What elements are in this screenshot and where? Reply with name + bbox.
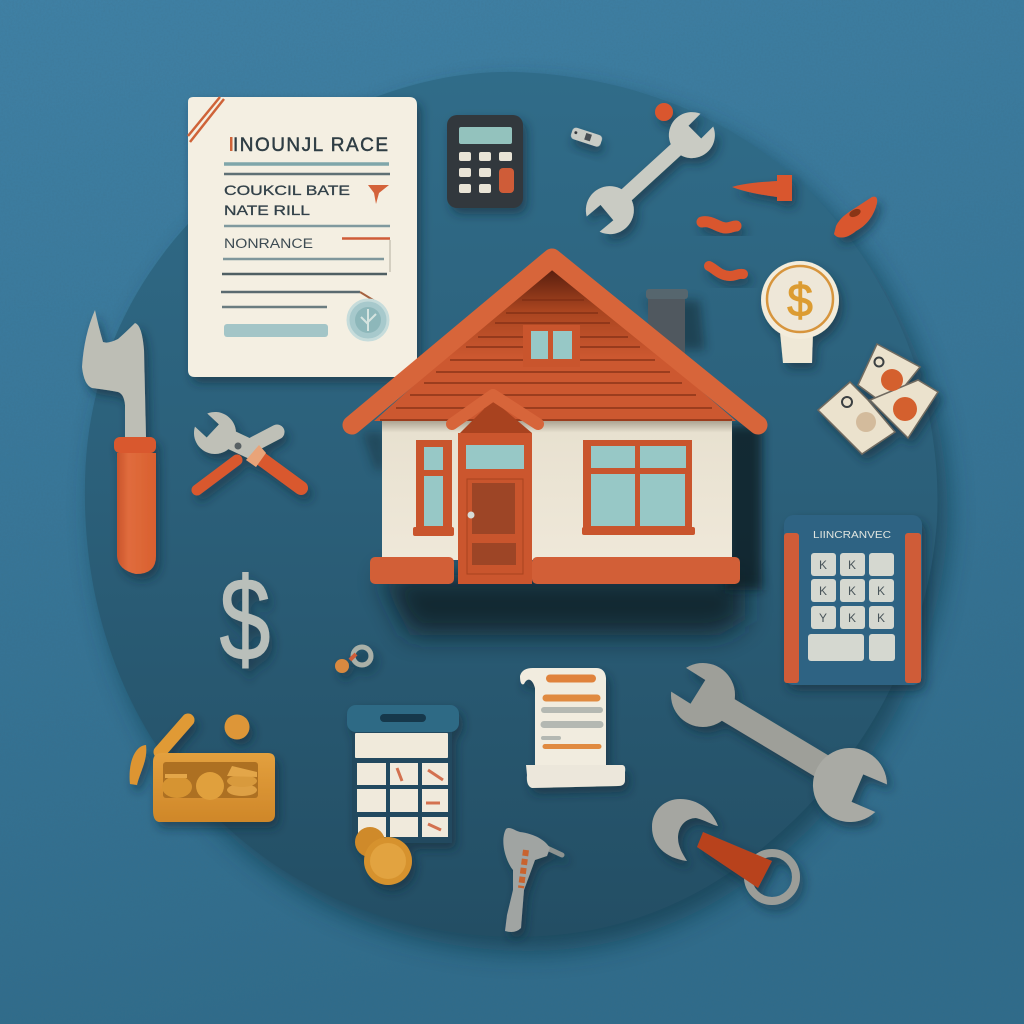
document title: INOUNJL RACE [233,135,388,156]
right window [582,440,695,535]
icon: small red funnel [368,185,389,204]
icon: grey wrench large [662,653,896,832]
keypad key letters: K [877,611,885,625]
keypad label: LIINCRANVEC [813,529,891,541]
keypad key letters: Y [819,611,827,625]
roof siding lines [380,300,732,420]
document text: insurance: NONRANCE [224,236,313,251]
icon: open wrench with red handle [652,799,796,901]
panel: insurance document [188,97,417,377]
icon: calculator top [447,115,523,208]
icon: gold coins [355,827,412,885]
keypad key letters: K [848,558,856,572]
icon: dollar sign: $ [219,554,271,686]
keypad key letters: K [848,611,856,625]
keypad key letters: K [819,558,827,572]
document teal bar [224,324,328,337]
document text: council rate: COUKCIL BATE [224,182,350,198]
icon: wrench top [578,104,723,243]
icon: crossed tools [187,405,301,490]
disc shadow [95,86,948,951]
illustration: house [352,258,758,584]
left window [413,440,454,536]
icon: calendar table [347,705,459,885]
keypad key letters: K [819,584,827,598]
icon: red clip one [702,222,736,228]
icon: banknotes [818,344,938,454]
attic window [523,325,580,367]
icon: keypad panel [784,515,922,685]
icon: small red ball [655,103,673,121]
door frame and door [458,433,532,584]
icon: hand tool [503,828,562,932]
foundation [370,557,740,584]
icon: red clip two [709,266,743,276]
icon: dollar bulb badge: $ [787,274,813,326]
house shadow [362,300,762,635]
icon: gold cash stack [130,714,275,822]
keypad key letters [819,558,885,625]
icon: receipt scroll [520,668,625,788]
document title accent [230,137,232,151]
roof eaves [352,258,758,425]
keypad key letters: K [848,584,856,598]
icon: small chain [335,647,371,673]
icon: axe hammer [82,310,156,574]
panel: circular base [85,72,938,937]
icon: document corner stripes [188,97,224,142]
roof gable [374,262,736,421]
document text: rate bill: NATE RILL [224,202,310,218]
document rule lines [221,164,390,307]
icon: dollar bulb badge [761,261,839,363]
door porch roof [452,395,538,444]
icon: small screw [570,127,603,148]
icon: red wing nut [834,197,877,238]
keypad key letters: K [877,584,885,598]
house walls [382,420,732,560]
icon: seal [348,300,388,340]
chimney [646,289,688,358]
icon: red bolt [732,175,792,201]
